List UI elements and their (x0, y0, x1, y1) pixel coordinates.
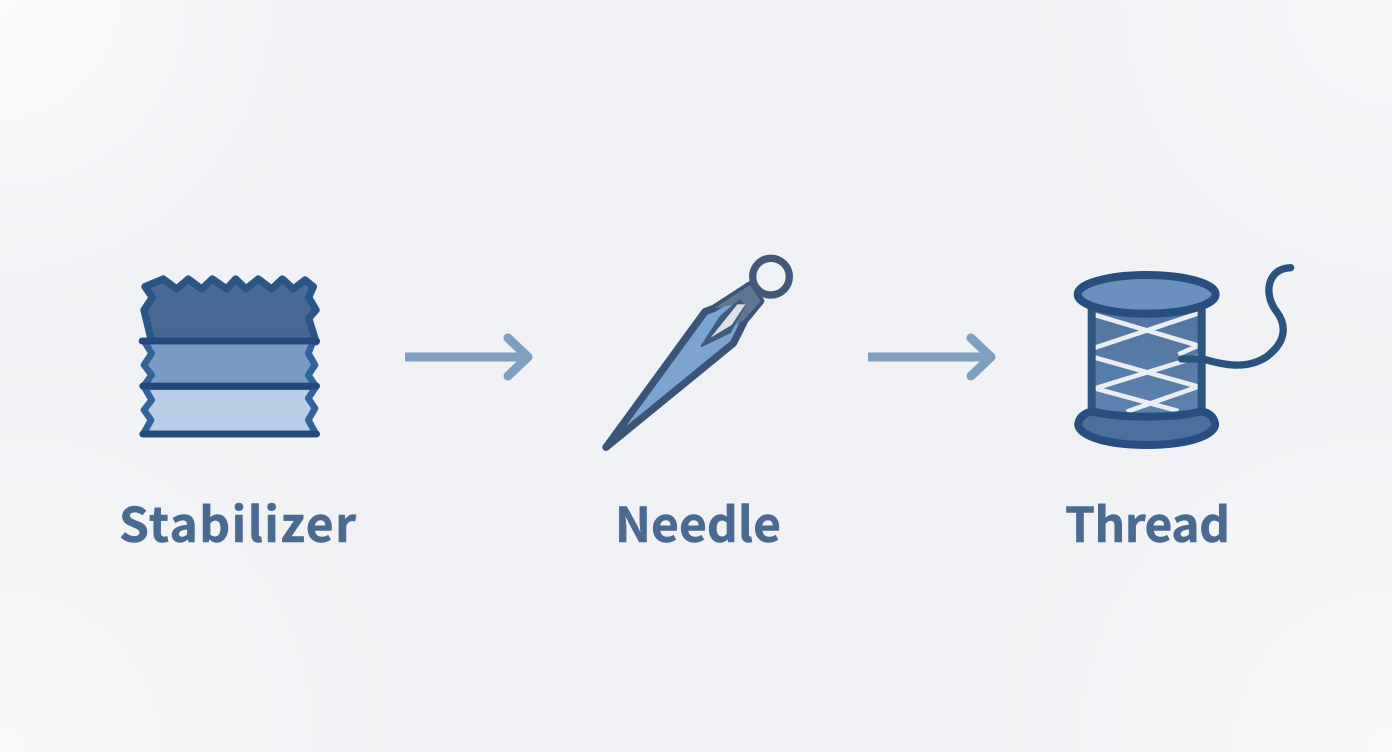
label: Needle: Needle (615, 486, 781, 556)
label: Stabilizer: Stabilizer (119, 486, 356, 556)
icon: stabilizer layers (142, 279, 317, 434)
icon: thread spool (1078, 268, 1291, 445)
arrow: needle to thread (868, 338, 991, 376)
thread windings (1095, 313, 1198, 412)
label: Thread: Thread (1065, 486, 1230, 556)
icon: needle (606, 258, 789, 447)
arrow: stabilizer to needle (405, 338, 528, 376)
